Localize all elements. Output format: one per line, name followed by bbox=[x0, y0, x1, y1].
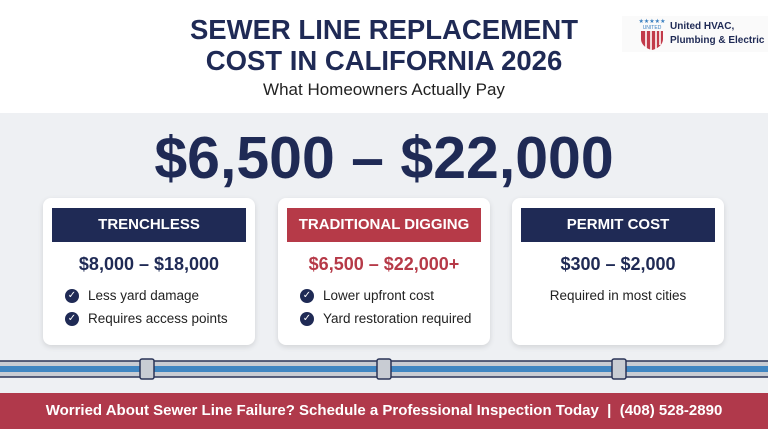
logo bbox=[622, 16, 768, 52]
icon: shield: ★★★★★ bbox=[639, 18, 665, 25]
panel: permit: Required in most cities bbox=[550, 288, 686, 303]
footer banner: Worried About Sewer Line Failure? Schedule a Professional Inspection Today | (408) 528-2890 bbox=[46, 402, 722, 419]
panel: trenchless: Requires access points bbox=[88, 311, 228, 326]
title: COST IN CALIFORNIA 2026 bbox=[206, 45, 562, 76]
panel: trenchless bbox=[43, 198, 255, 345]
panel: permit: $300 – $2,000 bbox=[560, 254, 676, 274]
panel: trenchless: Less yard damage bbox=[88, 288, 199, 303]
footer banner bbox=[0, 393, 768, 429]
logo: Plumbing & Electric bbox=[670, 35, 764, 46]
panel: permit bbox=[512, 198, 724, 345]
panel: trenchless: $8,000 – $18,000 bbox=[79, 254, 219, 274]
icon: shield bbox=[639, 18, 665, 50]
icon: shield: UNITED bbox=[643, 25, 662, 31]
big price range: $6,500 – $22,000 bbox=[154, 125, 614, 191]
logo: United HVAC, bbox=[670, 21, 734, 32]
panel: traditional: ✓ bbox=[303, 312, 311, 324]
panel: traditional: Yard restoration required bbox=[323, 311, 471, 326]
panel: traditional bbox=[278, 198, 490, 345]
panel: traditional: TRADITIONAL DIGGING bbox=[299, 216, 469, 233]
title: SEWER LINE REPLACEMENT bbox=[190, 14, 578, 45]
panel: traditional: ✓ bbox=[303, 290, 311, 300]
panel: traditional: Lower upfront cost bbox=[323, 288, 434, 303]
panel: trenchless: ✓ bbox=[68, 312, 76, 324]
header background bbox=[0, 0, 768, 113]
panel: trenchless: TRENCHLESS bbox=[98, 216, 200, 233]
panel: permit: PERMIT COST bbox=[567, 216, 669, 233]
panel: traditional: $6,500 – $22,000+ bbox=[309, 254, 459, 274]
subtitle: What Homeowners Actually Pay bbox=[263, 80, 505, 99]
title bbox=[190, 14, 578, 76]
pipe bbox=[0, 358, 768, 380]
panel: trenchless: ✓ bbox=[68, 290, 76, 300]
